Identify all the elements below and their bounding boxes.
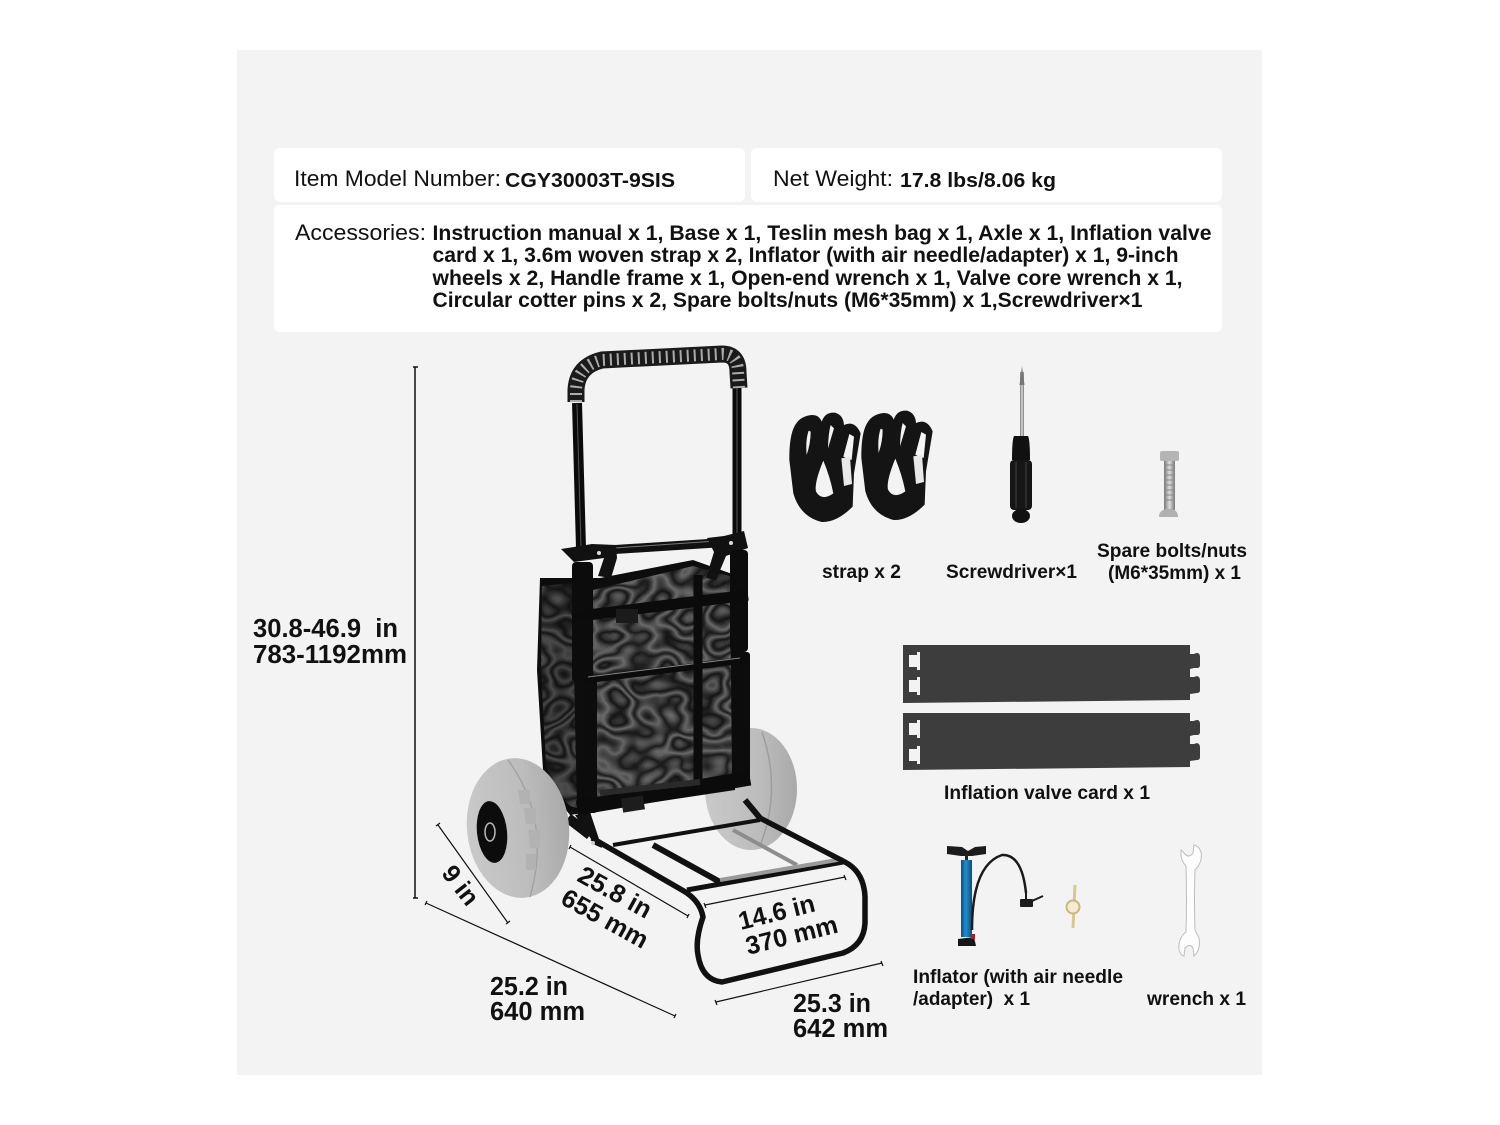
icon: bolt and nut bbox=[1159, 451, 1179, 517]
card: accessories bbox=[274, 205, 1222, 332]
grip handle bbox=[576, 354, 739, 402]
trolley illustration bbox=[466, 346, 868, 985]
label: height bbox=[253, 615, 407, 669]
label: inflator: Inflator (with air needle bbox=[913, 966, 1123, 988]
label: platform length bbox=[556, 859, 667, 954]
card: accessories: Circular cotter pins x 2, Spare bolts/nuts (M6*35mm) x 1,Screwdriver×1 bbox=[432, 289, 1143, 312]
platform frame bbox=[568, 800, 865, 982]
label: platform length: 655 mm bbox=[556, 884, 653, 954]
label: wrench: wrench x 1 bbox=[1146, 988, 1246, 1010]
card: accessories: Instruction manual x 1, Base x 1, Teslin mesh bag x 1, Axle x 1, Inflation valve bbox=[432, 222, 1212, 245]
icon: screwdriver bbox=[1010, 366, 1032, 523]
card: accessories: wheels x 2, Handle frame x 1, Open-end wrench x 1, Valve core wrench x 1, bbox=[431, 267, 1183, 290]
right wheel bbox=[705, 728, 797, 850]
dimension line: height bbox=[413, 367, 418, 898]
label: spare bolts: Spare bolts/nuts bbox=[1097, 540, 1247, 562]
card: net weight: 17.8 lbs/8.06 kg bbox=[900, 169, 1056, 192]
left wheel bbox=[460, 753, 576, 903]
label: overall width: 25.2 in bbox=[490, 973, 568, 1001]
label: platform width bbox=[736, 886, 841, 961]
card: item model number: Item Model Number: bbox=[294, 166, 501, 191]
card: item model number: CGY30003T-9SIS bbox=[505, 169, 675, 192]
label: spare bolts: (M6*35mm) x 1 bbox=[1108, 562, 1241, 584]
dimension line: frame width bbox=[715, 961, 883, 1005]
icon: straps bbox=[789, 411, 933, 522]
label: platform length: 25.8 in bbox=[573, 861, 657, 924]
icon: inflator pump bbox=[947, 846, 1043, 946]
dimension line: wheel width bbox=[436, 823, 510, 924]
label: inflation valve card: Inflation valve card x 1 bbox=[944, 782, 1150, 804]
label: frame width bbox=[793, 990, 888, 1043]
label: platform width: 14.6 in bbox=[736, 890, 818, 936]
label: strap: strap x 2 bbox=[822, 561, 901, 583]
label: spare bolts bbox=[1097, 540, 1247, 584]
card: net weight: Net Weight: bbox=[773, 166, 893, 191]
telescopic rods and sleeves bbox=[561, 388, 750, 813]
label: overall width: 640 mm bbox=[490, 998, 585, 1026]
bottom strap bbox=[577, 778, 750, 813]
dimension line: overall width bbox=[425, 901, 676, 1018]
label: height: 783-1192mm bbox=[253, 641, 407, 669]
icon: valve core wrench bbox=[1066, 885, 1080, 928]
label: screwdriver: Screwdriver×1 bbox=[946, 561, 1077, 583]
card: accessories: Accessories: bbox=[295, 220, 426, 245]
dimension line: platform length bbox=[569, 845, 689, 918]
mesh bag bbox=[537, 560, 735, 815]
card: item model number bbox=[274, 148, 745, 202]
label: platform width: 370 mm bbox=[743, 911, 841, 961]
label: wheel width: 9 in bbox=[436, 860, 485, 911]
icon: inflation valve cards bbox=[903, 645, 1200, 770]
label: frame width: 25.3 in bbox=[793, 990, 871, 1018]
label: inflator: /adapter) x 1 bbox=[913, 988, 1030, 1010]
label: inflator bbox=[913, 966, 1123, 1010]
icon: open-end wrench bbox=[1179, 845, 1201, 956]
dimension line: platform width bbox=[704, 875, 846, 908]
card: accessories: card x 1, 3.6m woven strap x 2, Inflator (with air needle/adapter) x 1, 9-inch bbox=[432, 244, 1178, 267]
label: frame width: 642 mm bbox=[793, 1015, 888, 1043]
label: overall width bbox=[490, 973, 585, 1026]
label: height: 30.8-46.9 in bbox=[253, 615, 398, 643]
background panel bbox=[237, 50, 1262, 1075]
card: net weight bbox=[751, 148, 1222, 202]
